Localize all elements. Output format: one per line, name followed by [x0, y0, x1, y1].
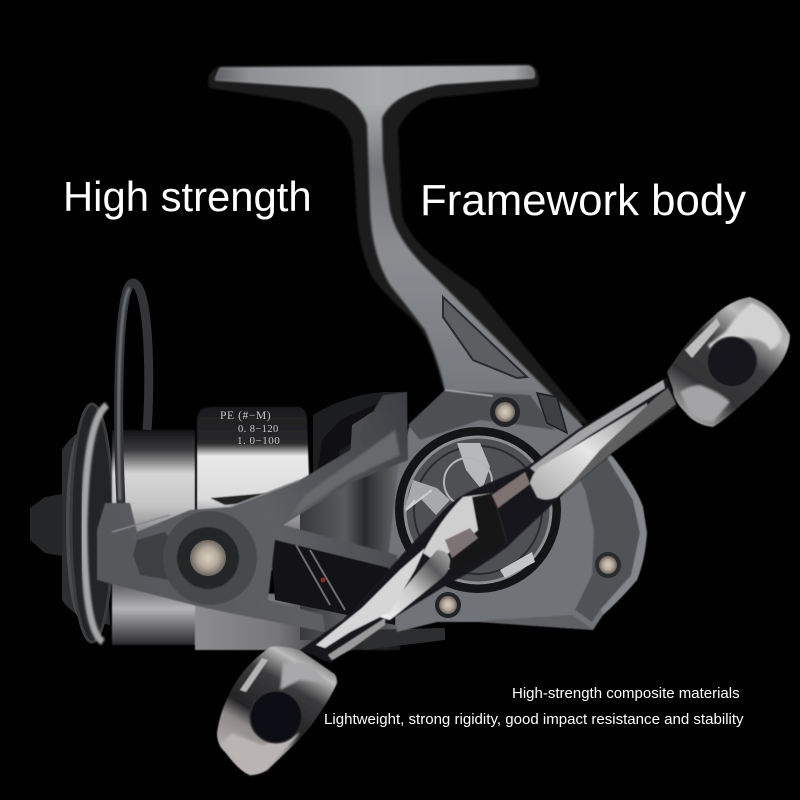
screw: frame lower — [435, 592, 461, 618]
screw: frame right — [595, 552, 621, 578]
caption: materials: High-strength composite materials — [512, 685, 740, 702]
reel foot and stem — [208, 64, 590, 425]
spool capacity markings: 0. 8−120 — [238, 424, 279, 435]
reel body frame — [388, 390, 647, 632]
spool body — [112, 407, 400, 650]
rotor arm — [97, 392, 408, 632]
spool capacity markings: 1. 0−100 — [237, 435, 280, 447]
spool capacity markings: PE (#−M) — [220, 410, 271, 422]
screw: frame upper — [490, 397, 520, 427]
rotor gear window — [395, 427, 561, 593]
heading: framework body: Framework body — [420, 176, 746, 225]
line roller cup — [313, 392, 407, 490]
stem pocket recess — [443, 297, 527, 378]
upper handle knob — [667, 297, 790, 427]
crank handle — [300, 377, 677, 663]
internal cone and mechanism — [270, 450, 445, 650]
bail wire — [119, 283, 149, 505]
screw: bail arm — [190, 540, 226, 576]
spool flange and rear knob — [30, 404, 113, 642]
heading: high strength: High strength — [63, 173, 312, 220]
lower handle knob — [217, 646, 337, 775]
frame vent recess — [537, 393, 567, 433]
spool capacity markings — [220, 410, 280, 447]
caption: properties: Lightweight, strong rigidity, good impact resistance and stability — [324, 711, 744, 728]
